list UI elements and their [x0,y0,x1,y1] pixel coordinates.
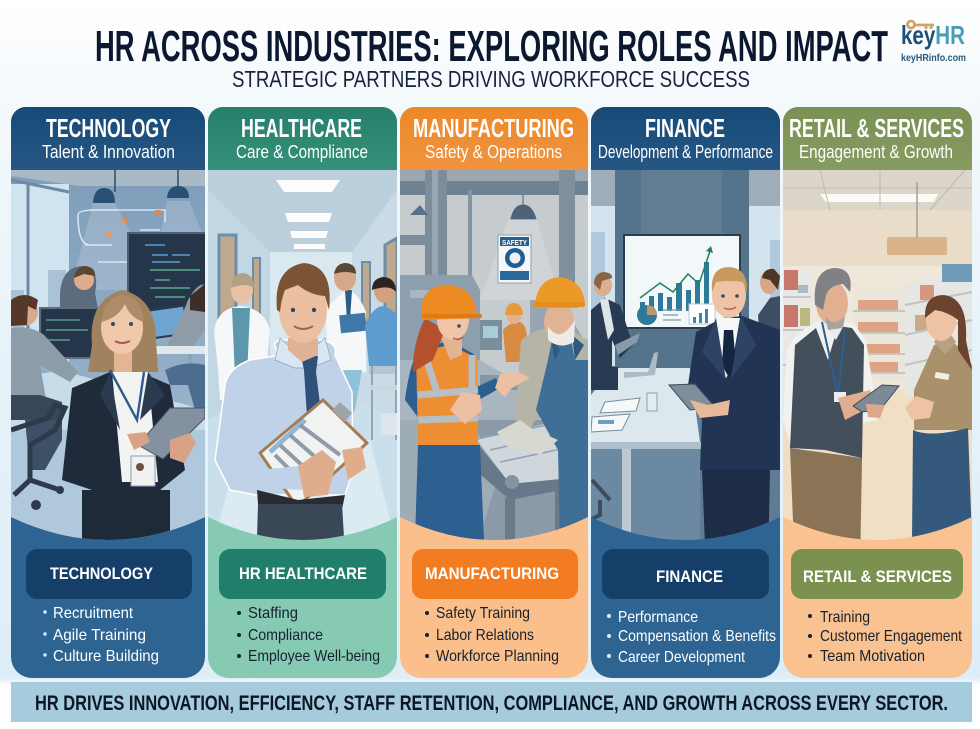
label box [412,549,578,599]
panel header [591,107,780,170]
bullets [808,616,812,656]
item: Employee Well-being [248,648,380,665]
logo: keyHR [901,20,966,64]
logo wordmark: keyHR [901,20,965,50]
band [11,682,972,722]
heading: HEALTHCARE [241,113,362,143]
panel: technology [10,107,208,678]
item: Safety Training [436,605,530,622]
logo url: keyHRinfo.com [901,52,966,64]
heading: FINANCE [645,113,725,143]
illustration: hospital corridor [208,170,397,570]
panel: finance [590,107,780,678]
box title: RETAIL & SERVICES [803,567,952,586]
panel: manufacturing [400,107,590,678]
item: Staffing [248,605,298,622]
box title: FINANCE [656,567,723,586]
label box [26,549,192,599]
item: Recruitment [53,605,134,622]
panel body [208,107,397,678]
item: Training [820,609,870,626]
bullets [607,616,611,656]
panel header [11,107,205,170]
illustration: finance office [590,170,780,570]
icon: key [908,21,934,29]
item: Compliance [248,627,323,644]
box [219,549,386,599]
label box [602,549,769,599]
subheading: Talent & Innovation [42,142,175,162]
item: Performance [618,609,698,626]
item: Labor Relations [436,627,534,644]
panel body [11,107,205,678]
heading: TECHNOLOGY [46,113,171,143]
panel body [591,107,780,678]
panel body [783,107,972,678]
label box [219,549,386,599]
footer band [11,682,972,722]
panel header [783,107,972,170]
illustration: factory floor [400,170,590,570]
box [602,549,769,599]
subtitle: STRATEGIC PARTNERS DRIVING WORKFORCE SUCCESS [232,66,750,92]
heading: MANUFACTURING [413,113,574,143]
label box [791,549,963,599]
list [45,605,159,665]
box [26,549,192,599]
subheading: Engagement & Growth [799,142,953,162]
subheading: Safety & Operations [425,142,562,162]
bullets [425,613,429,656]
subheading: Care & Compliance [236,142,368,162]
bullets [237,613,241,656]
panel header [400,107,588,170]
item: Career Development [618,649,745,666]
panel: retail and services [783,107,972,678]
panel body [400,107,588,678]
illustration: factory floor: SAFETY [502,238,527,247]
list [810,609,962,665]
list [609,609,776,666]
bullets [43,612,47,655]
item: Agile Training [53,627,146,644]
box [791,549,963,599]
box title: HR HEALTHCARE [239,564,367,583]
box title: MANUFACTURING [425,564,559,583]
panel header [208,107,397,170]
list [427,605,559,665]
item: Workforce Planning [436,648,559,665]
panel: healthcare [208,107,397,678]
box [412,549,578,599]
item: Customer Engagement [820,628,962,645]
list [239,605,380,665]
item: Team Motivation [820,648,925,665]
box title: TECHNOLOGY [50,564,154,583]
illustration: retail store [783,170,972,570]
subheading: Development & Performance [598,142,773,162]
item: Compensation & Benefits [618,628,776,645]
illustration: tech office [10,170,208,570]
item: Culture Building [53,648,159,665]
